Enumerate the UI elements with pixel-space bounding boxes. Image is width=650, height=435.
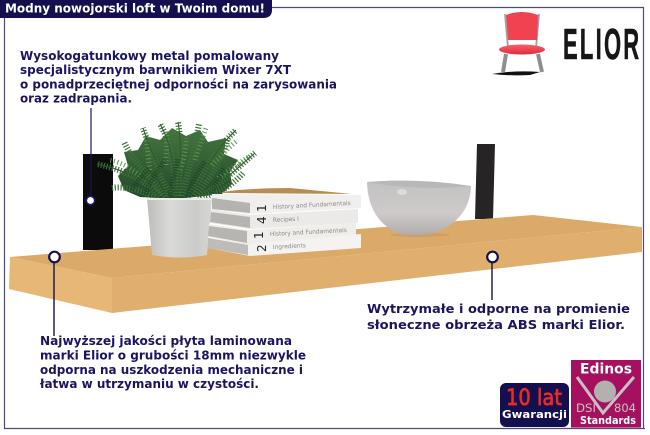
book stack: Recipes I [273,216,299,224]
callout: edge marker [487,252,498,300]
text block: laminated board: łatwa w utrzymaniu w czystości. [39,377,259,391]
callout: metal marker [86,108,95,205]
book 3 [208,223,356,244]
text block: metal description [20,49,337,106]
book 4 [208,234,361,256]
text block: laminated board: odporna na uszkodzenia mechaniczne i [40,363,303,377]
badge: Edinos standards: DSI [576,401,596,415]
text block: laminated board: Najwyższej jakości płyta laminowana [40,334,292,348]
book 1 [212,194,361,214]
shelf [9,215,642,313]
badge: Edinos standards: Edinos [580,362,632,378]
logo: chair icon and ELIOR [492,12,641,75]
logo: chair icon and ELIOR: ELIOR [563,21,641,69]
badge: Edinos standards: Standards [580,415,636,427]
book stack: 2 [255,244,269,252]
book stack: History and Fundamentals [273,200,351,211]
callout: board marker [49,252,60,336]
bowl [367,181,471,237]
book stack [208,188,361,256]
plant [97,122,255,199]
badge: Edinos standards [571,360,641,428]
book stack: 1 [252,231,266,239]
text block: ABS edges [367,302,630,332]
book stack: 1 [255,204,269,212]
badge: 10 years warranty: Gwarancji [502,408,567,421]
text block: metal description: o ponadprzeciętnej odporności na zarysowania [20,78,337,92]
text block: ABS edges: Wytrzymałe i odporne na promienie [367,302,630,316]
flower pot [147,198,212,258]
badge: Edinos standards: 804 [614,401,636,415]
text block: metal description: Wysokogatunkowy metal pomalowany [20,49,279,63]
book 2 [210,209,358,229]
left bracket [83,154,113,250]
text block: laminated board: marki Elior o grubości 18mm niezwykle [40,348,306,362]
book stack: 4 [255,216,269,224]
book stack: Ingredients [273,242,306,251]
text block: metal description: specjalistycznym barwnikiem Wixer 7XT [20,63,292,77]
right bracket [475,144,495,219]
text block: metal description: oraz zadrapania. [20,92,132,106]
text block: ABS edges: słoneczne obrzeża ABS marki Elior. [367,318,625,332]
book stack: History and Fundamentals [270,227,347,238]
badge: 10 years warranty [500,383,569,427]
badge: 10 years warranty: 10 lat [506,386,562,411]
text block: laminated board [39,334,306,391]
header banner: Modny nowojorski loft w Twoim domu! [5,2,265,16]
